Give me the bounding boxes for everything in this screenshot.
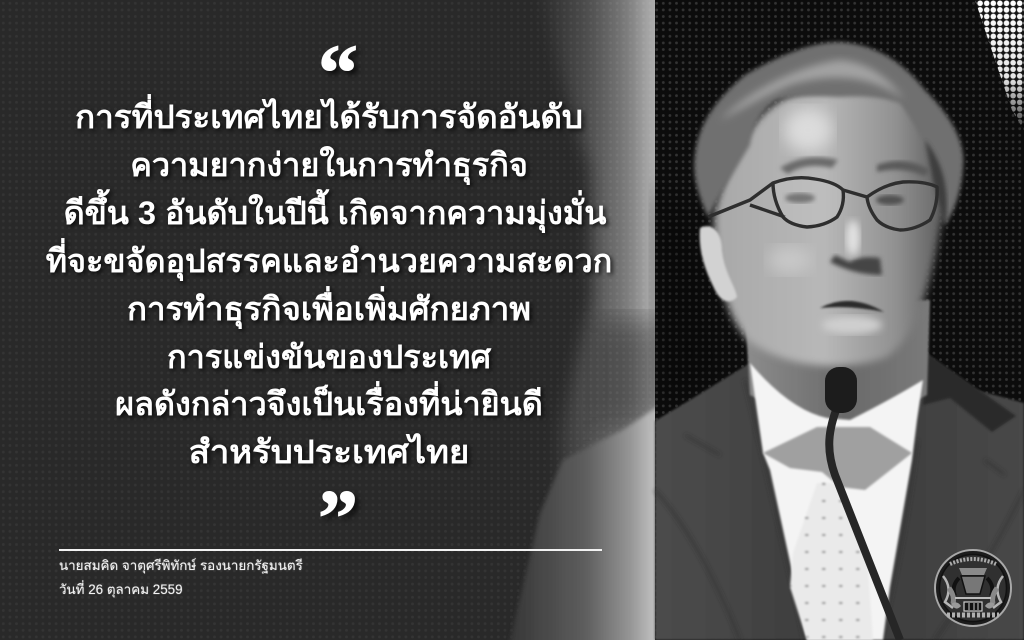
opening quotation mark: “ — [318, 30, 358, 118]
hair — [694, 42, 963, 225]
photo: tie — [763, 427, 912, 640]
quote text: ความยากง่ายในการทำธุรกิจ — [130, 147, 528, 183]
cheeks — [768, 246, 812, 274]
photo: shirt — [750, 363, 923, 640]
left panel — [0, 0, 700, 640]
eyes — [785, 193, 815, 203]
nose — [830, 255, 882, 275]
emblem seal — [935, 550, 1011, 626]
speaker credit and date — [59, 558, 303, 598]
speaker credit and date: นายสมคิด จาตุศรีพิทักษ์ รองนายกรัฐมนตรี — [59, 558, 303, 573]
photo: neck — [745, 300, 930, 435]
quote text: ที่จะขจัดอุปสรรคและอำนวยความสะดวก — [46, 243, 612, 279]
quote text: การที่ประเทศไทยได้รับการจัดอันดับ — [75, 99, 583, 135]
quote text — [46, 94, 616, 470]
photo: head and hair — [694, 42, 963, 366]
mouth — [820, 301, 884, 312]
speaker credit and date: วันที่ 26 ตุลาคม 2559 — [59, 582, 183, 597]
quote text: สำหรับประเทศไทย — [189, 434, 469, 470]
quote text: ดีขึ้น 3 อันดับในปีนี้ เกิดจากความมุ่งมั่น — [64, 195, 606, 231]
photo: dotted LED backdrop — [655, 0, 1024, 640]
forehead highlight — [784, 108, 832, 152]
photo: glasses — [708, 178, 937, 230]
photo: suit — [655, 353, 1024, 640]
quote text: การทำธุรกิจเพื่อเพิ่มศักยภาพ — [127, 291, 531, 327]
ghosted shoulder in left panel — [508, 405, 660, 640]
divider rule — [59, 549, 602, 551]
quote text: ผลดังกล่าวจึงเป็นเรื่องที่น่ายินดี — [115, 386, 543, 422]
quote text: การแข่งขันของประเทศ — [167, 339, 491, 375]
photo: microphone — [825, 367, 900, 640]
brows — [780, 157, 838, 174]
darker band above shoulder — [590, 320, 660, 430]
ear — [700, 226, 737, 301]
closing quotation mark: ” — [318, 475, 358, 563]
